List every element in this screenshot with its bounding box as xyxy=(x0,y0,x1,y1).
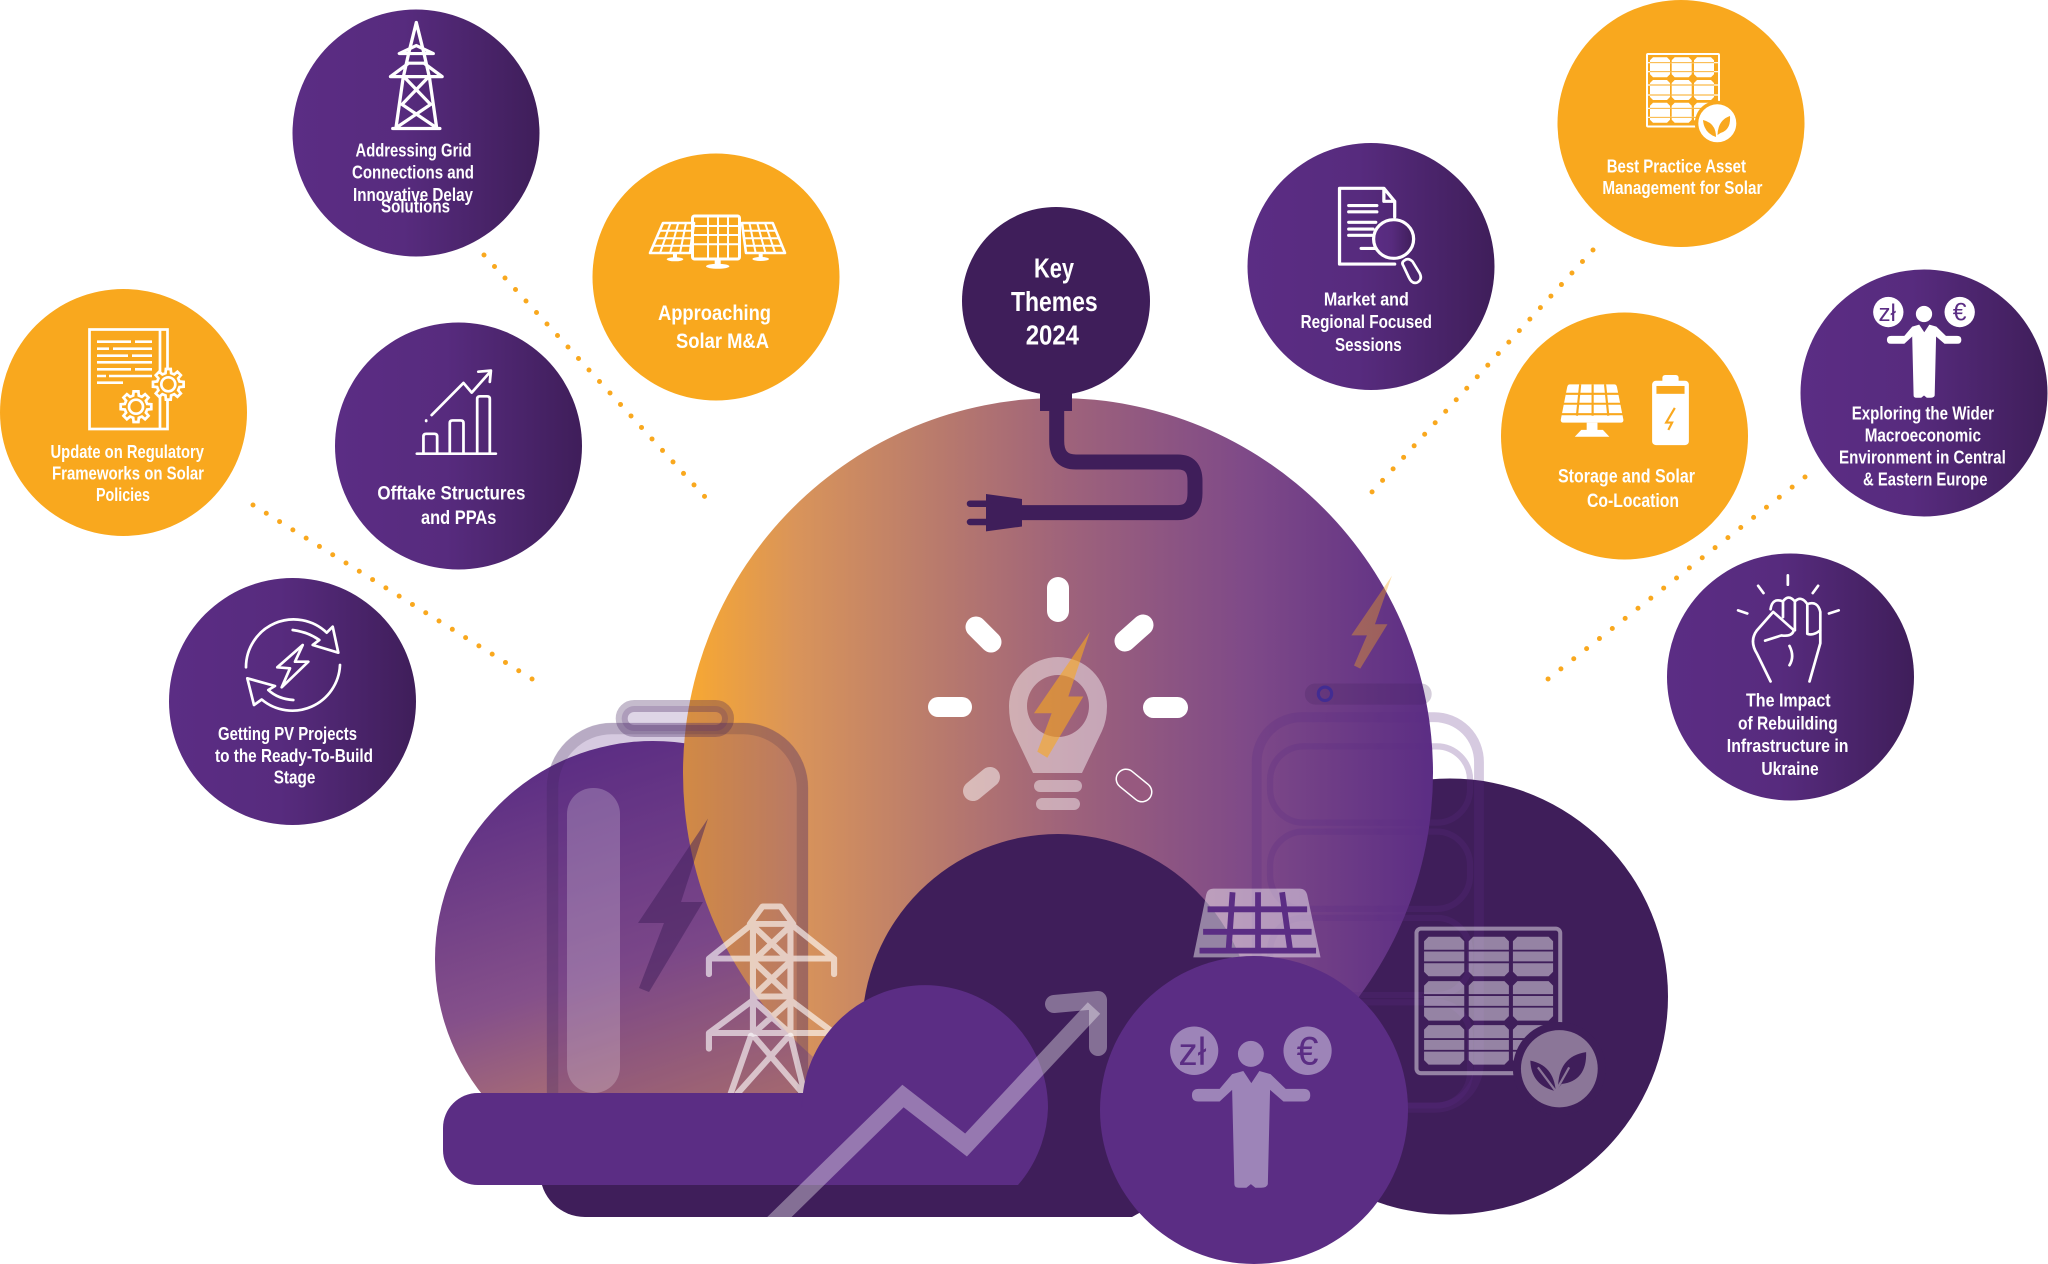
title: Key xyxy=(1034,252,1074,284)
icon: solar panel xyxy=(1561,384,1623,437)
panel: Offtake Structures and PPAs xyxy=(335,322,582,570)
panel: Getting PV Projects xyxy=(169,578,416,825)
label xyxy=(1301,288,1432,355)
icon: person with currencies: € xyxy=(1953,300,1967,327)
label xyxy=(1558,467,1695,512)
dotted connector: upper right xyxy=(1372,250,1593,492)
label: Macroeconomic xyxy=(1865,424,1981,445)
icon: three solar panels xyxy=(650,216,785,269)
label: Approaching xyxy=(658,302,771,325)
label xyxy=(658,302,771,353)
icon: pylon xyxy=(391,22,442,129)
panel: Approaching Solar M&A xyxy=(592,154,840,400)
icon: person with currencies: zł xyxy=(1878,300,1897,327)
icon: plug cord xyxy=(970,392,1195,531)
label: Market and xyxy=(1324,288,1409,309)
icon: small solar panel xyxy=(1193,889,1321,957)
icon: person balancing currencies xyxy=(1170,1027,1332,1188)
large gradient circle xyxy=(683,398,1433,1148)
right dark circle xyxy=(1232,778,1668,1214)
icon: battery xyxy=(1652,375,1689,445)
label: Addressing Grid xyxy=(356,139,472,160)
label: Policies xyxy=(96,484,150,505)
icon: person with currencies xyxy=(1873,297,1975,398)
title xyxy=(1011,252,1098,350)
panel: The Impact of Rebuilding Infrastructure in Ukraine xyxy=(1667,554,1914,800)
label: Storage and Solar xyxy=(1558,467,1695,488)
title: Themes xyxy=(1011,286,1098,317)
label: Innovative Delay xyxy=(353,184,474,205)
icon: raised fist xyxy=(1738,575,1839,681)
label: Management for Solar xyxy=(1602,177,1762,198)
label: Stage xyxy=(274,767,315,788)
label xyxy=(1727,690,1848,779)
label: Exploring the Wider xyxy=(1852,402,1994,424)
panel: Addressing Grid Connections xyxy=(292,10,540,256)
label: Connections and xyxy=(352,161,474,182)
icon: document with magnifier xyxy=(1340,188,1421,283)
dotted connector: upper left xyxy=(484,255,706,498)
label xyxy=(377,483,526,529)
label: of Rebuilding xyxy=(1738,713,1838,734)
icon: left battery xyxy=(547,706,808,1100)
label: Offtake Structures xyxy=(377,483,526,505)
label xyxy=(1839,402,2006,489)
icon: light bulb with rays xyxy=(928,577,1188,810)
title: 2024 xyxy=(1026,320,1079,350)
panel: Exploring the Wider Macroeconomic Environment xyxy=(1800,270,2048,516)
icon: left lightning bolt xyxy=(638,818,708,992)
label xyxy=(50,441,205,505)
purple circle with person xyxy=(1100,956,1408,1264)
label: The Impact xyxy=(1746,690,1831,711)
label: and PPAs xyxy=(421,507,497,529)
icon: solar panel with leaf badge xyxy=(1647,54,1740,146)
icon: rising arrow xyxy=(760,1000,1098,1236)
icon: cycle with lightning bolt xyxy=(246,619,340,711)
label: Environment in Central xyxy=(1839,446,2006,467)
label: to the Ready-To-Build xyxy=(215,745,373,766)
label: Regional Focused xyxy=(1301,311,1432,332)
label: Frameworks on Solar xyxy=(52,462,204,483)
purple platform bar xyxy=(443,1093,810,1185)
label: Solutions xyxy=(381,196,450,217)
icon: document with gears xyxy=(90,330,184,429)
title circle: Key Themes 2024 xyxy=(962,207,1150,395)
icon: right battery xyxy=(1257,683,1479,1108)
label: Co-Location xyxy=(1587,491,1679,512)
label: Solar M&A xyxy=(676,330,769,353)
icon: person balancing currencies: zł xyxy=(1179,1031,1207,1074)
panel: Storage and Solar Co-Location xyxy=(1501,312,1748,560)
label: & Eastern Europe xyxy=(1863,468,1988,489)
panel: Best Practice Asset Management xyxy=(1558,0,1804,247)
icon: person balancing currencies: € xyxy=(1297,1030,1319,1074)
label: Best Practice Asset xyxy=(1607,156,1746,177)
icon: right lightning bolt xyxy=(1351,576,1392,669)
label xyxy=(1602,156,1762,198)
illustration: central energy scene xyxy=(435,392,1668,1264)
icon: transmission tower xyxy=(709,906,834,1093)
label: Infrastructure in xyxy=(1727,735,1848,756)
dark base xyxy=(540,1150,1141,1217)
icon: bar chart with arrow xyxy=(417,371,496,454)
label: Sessions xyxy=(1335,334,1402,355)
label: Getting PV Projects xyxy=(218,723,357,744)
purple bump shape xyxy=(800,985,1048,1185)
panel: Update on Regulatory Frameworks xyxy=(0,289,247,536)
label: Ukraine xyxy=(1761,758,1819,779)
label xyxy=(352,139,474,217)
dotted connector: lower left xyxy=(253,505,532,679)
label xyxy=(215,723,373,788)
icon: solar panel with leaf xyxy=(1416,929,1606,1115)
center dark dome xyxy=(864,834,1240,1150)
panel: Market and Regional Focused Sessions xyxy=(1248,143,1494,390)
dotted connector: lower right xyxy=(1548,477,1805,679)
left gradient circle xyxy=(435,741,871,1177)
label: Update on Regulatory xyxy=(50,441,205,462)
